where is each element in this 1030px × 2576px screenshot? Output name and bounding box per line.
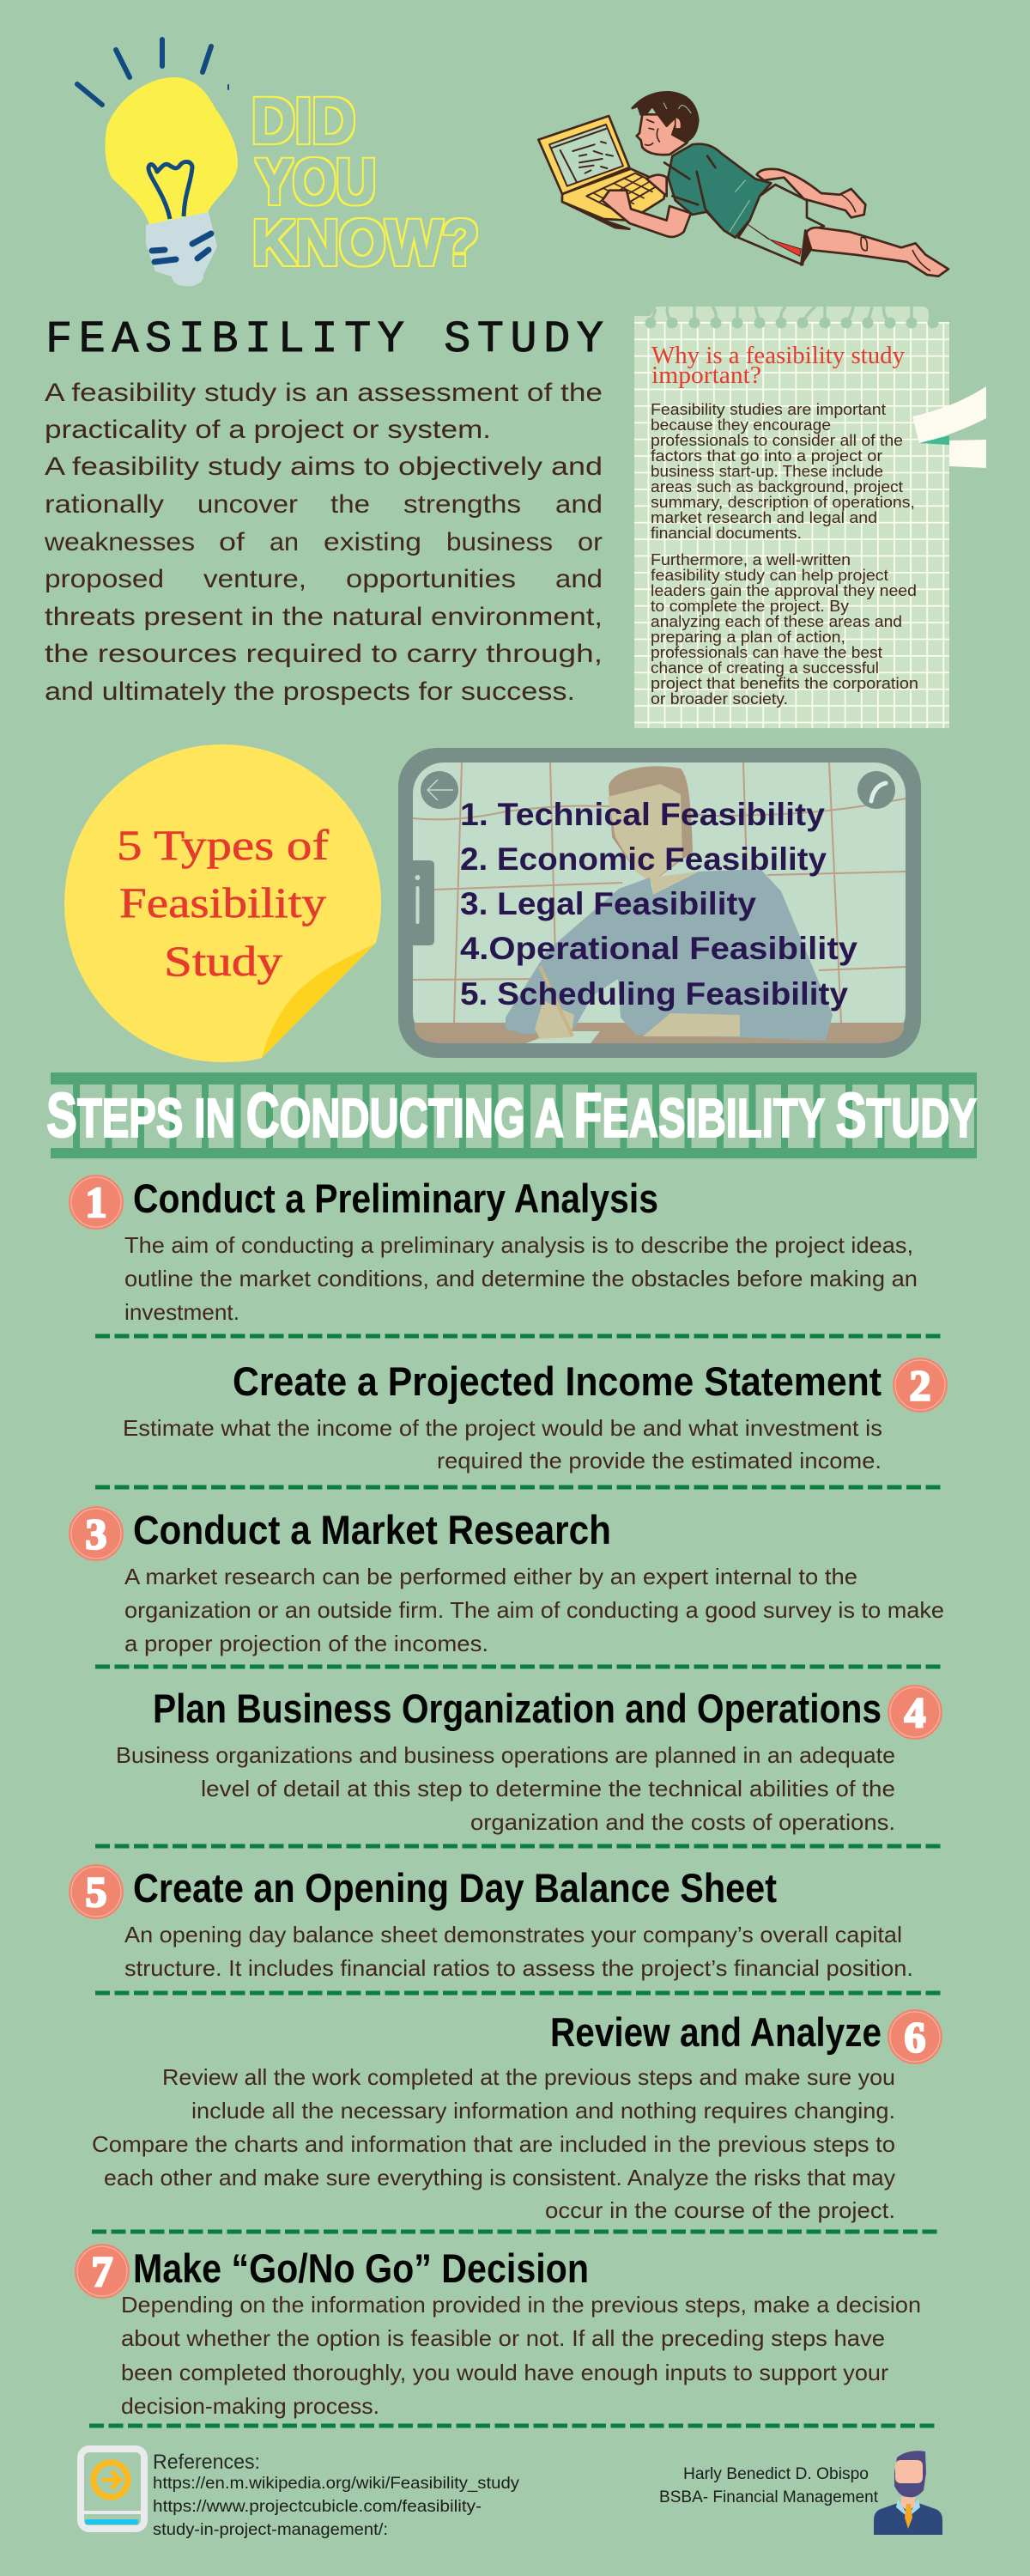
step text 5 (124, 1922, 913, 1981)
text block: importance paragraphs: chance of creating a successful (651, 659, 879, 677)
heading: why is a feasibility study important (651, 343, 905, 389)
icon: back button (421, 771, 458, 809)
step text 1: investment. (124, 1299, 239, 1325)
step text 2: Estimate what the income of the project would be and what investment is (123, 1415, 882, 1441)
badge 6 (888, 2009, 942, 2064)
text block: references: study-in-project-management/: (153, 2521, 388, 2539)
badge 2 (893, 1358, 948, 1413)
step text 4: organization and the costs of operations. (470, 1809, 895, 1835)
icon: paper tape (912, 386, 986, 468)
step text 7: decision-making process. (121, 2393, 379, 2419)
text block: importance paragraphs: or broader society. (651, 690, 788, 708)
list: types of feasibility (460, 797, 857, 1012)
step title 5: Create an Opening Day Balance Sheet (133, 1865, 777, 1911)
icon: author avatar (874, 2451, 942, 2535)
badge 4: 4 (905, 1688, 925, 1736)
panel: phone with feasibility types (398, 748, 921, 1058)
step text 5: structure. It includes financial ratios to assess the project’s financial position. (124, 1955, 913, 1981)
badge 7 (75, 2244, 130, 2299)
step title 1: Conduct a Preliminary Analysis (133, 1176, 658, 1221)
badge 1 (69, 1175, 124, 1230)
step text 7: Depending on the information provided in the previous steps, make a decision (121, 2292, 921, 2318)
text block: references: https://en.m.wikipedia.org/wiki/Feasibility_study (153, 2475, 520, 2493)
text block: importance paragraphs: areas such as background, project (651, 477, 903, 495)
step 7 (75, 2244, 921, 2419)
text block: references: https://www.projectcubicle.com/feasibility- (153, 2498, 482, 2516)
step text 3: A market research can be performed either by an expert internal to the (124, 1564, 857, 1589)
step 6 (92, 2009, 942, 2223)
text block: importance paragraphs: factors that go into a project or (651, 447, 882, 465)
text block: feasibility study definition: strengths (403, 490, 521, 519)
text block: feasibility study definition: the resources required to carry through, (45, 640, 603, 668)
text block: importance paragraphs: market research and legal and (651, 508, 877, 526)
step 2 (123, 1358, 948, 1473)
badge 7: 7 (91, 2247, 113, 2295)
list: types of feasibility: 5. Scheduling Feasibility (460, 976, 848, 1012)
callout: 5 types sticker: 5 Types of (117, 821, 329, 869)
heading: why is a feasibility study important: important? (651, 362, 761, 389)
text block: importance paragraphs: to complete the project. By (651, 597, 850, 615)
step 4 (116, 1685, 942, 1835)
step text 7: about whether the option is feasible or not. If all the preceding steps have (121, 2325, 885, 2351)
step text 6: Compare the charts and information that are included in the previous steps to (92, 2131, 895, 2157)
step text 6: each other and make sure everything is consistent. Analyze the risks that may (104, 2165, 895, 2190)
text block: feasibility study definition: business (446, 528, 553, 556)
text block: author: Harly Benedict D. Obispo (683, 2465, 869, 2483)
text block: importance paragraphs (651, 400, 918, 708)
step text 1: outline the market conditions, and determine the obstacles before making an (124, 1266, 918, 1291)
text block: feasibility study definition: weaknesses (44, 528, 195, 556)
text block: importance paragraphs: summary, description of operations, (651, 493, 915, 511)
text block: importance paragraphs: analyzing each of these areas and (651, 612, 902, 630)
text block: author: BSBA- Financial Management (659, 2488, 879, 2506)
heading: why is a feasibility study important: Why is a feasibility study (651, 343, 905, 369)
text block: importance paragraphs: financial documents. (651, 524, 802, 542)
badge 4 (888, 1685, 942, 1740)
step text 1: The aim of conducting a preliminary analysis is to describe the project ideas, (124, 1232, 913, 1258)
heading banner: steps in conducting: STEPS IN CONDUCTING A FEASIBILITY STUDY (46, 1081, 977, 1151)
text block: feasibility study definition (44, 379, 603, 706)
badge 3 (69, 1506, 124, 1561)
callout: 5 types sticker (64, 744, 381, 1062)
text block: feasibility study definition: practicality of a project or system. (45, 416, 491, 444)
heading: did you know: KNOW? (252, 207, 479, 278)
badge 6: 6 (905, 2013, 925, 2061)
step title 3: Conduct a Market Research (133, 1507, 611, 1552)
text block: feasibility study definition: existing (324, 528, 421, 556)
text block: importance paragraphs: professionals to consider all of the (651, 431, 903, 449)
text block: feasibility study definition: opportunities (346, 565, 516, 593)
text block: author (659, 2465, 879, 2506)
text block: feasibility study definition: uncover (197, 490, 298, 519)
text block: importance paragraphs: leaders gain the approval they need (651, 581, 917, 599)
icon: light bulb (77, 39, 238, 286)
illustration: boy with laptop (538, 92, 948, 276)
icon: reference book (81, 2449, 144, 2529)
badge 1: 1 (86, 1178, 106, 1226)
step text 6: Review all the work completed at the previous steps and make sure you (162, 2064, 895, 2090)
badge 5 (69, 1864, 124, 1919)
step text 2 (123, 1415, 882, 1473)
heading: feasibility study: FEASIBILITY STUDY (45, 314, 603, 365)
callout: 5 types sticker: Feasibility (119, 878, 326, 927)
list: types of feasibility: 3. Legal Feasibility (460, 886, 756, 921)
step text 4: level of detail at this step to determine the technical abilities of the (201, 1776, 895, 1801)
badge 3: 3 (86, 1510, 106, 1558)
text block: feasibility study definition: the (330, 490, 370, 519)
step title 2: Create a Projected Income Statement (233, 1358, 882, 1404)
text block: feasibility study definition: A feasibility study aims to objectively and (45, 453, 603, 481)
step 1 (69, 1175, 918, 1325)
step text 1 (124, 1232, 918, 1325)
panel: notebook note (634, 307, 986, 728)
list: types of feasibility: 4.Operational Feasibility (460, 931, 857, 966)
heading: did you know: YOU (256, 146, 376, 217)
step title 7: Make “Go/No Go” Decision (133, 2245, 589, 2291)
text block: importance paragraphs: Feasibility studies are important (651, 400, 886, 418)
icon: call button (857, 771, 895, 809)
heading: did you know (251, 85, 479, 278)
step text 3: a proper projection of the incomes. (124, 1631, 488, 1656)
step text 7: been completed thoroughly, you would have enough inputs to support your (121, 2360, 888, 2385)
heading: did you know: DID (251, 85, 355, 156)
step 3 (69, 1506, 944, 1656)
text block: importance paragraphs: project that benefits the corporation (651, 674, 918, 692)
illustration: man at desk (413, 762, 906, 1043)
text block: references: References: (153, 2451, 260, 2474)
text block: importance paragraphs: because they encourage (651, 416, 831, 434)
step text 6 (92, 2064, 895, 2223)
text block: feasibility study definition: of (219, 528, 245, 556)
badge 5: 5 (86, 1868, 106, 1916)
text block: feasibility study definition: or (578, 528, 603, 556)
text block: feasibility study definition: and (555, 490, 603, 519)
step text 3: organization or an outside firm. The aim of conducting a good survey is to make (124, 1597, 944, 1623)
step text 6: occur in the course of the project. (545, 2197, 895, 2223)
step text 2: required the provide the estimated income. (437, 1448, 882, 1473)
step text 6: include all the necessary information and nothing requires changing. (191, 2098, 895, 2123)
step text 4 (116, 1742, 895, 1835)
step text 3 (124, 1564, 944, 1656)
step text 7 (121, 2292, 921, 2419)
text block: feasibility study definition: and ultimately the prospects for success. (45, 677, 575, 706)
text block: importance paragraphs: professionals can have the best (651, 643, 882, 661)
text block: importance paragraphs: business start-up. These include (651, 462, 883, 480)
text block: importance paragraphs: preparing a plan of action, (651, 628, 845, 646)
phone notch (413, 860, 434, 945)
badge 2: 2 (910, 1361, 930, 1409)
text block: feasibility study definition: rationally (45, 490, 164, 519)
text block: feasibility study definition: and (555, 565, 603, 593)
text block: importance paragraphs: Furthermore, a well-written (651, 550, 851, 568)
text block: importance paragraphs: feasibility study can help project (651, 566, 888, 584)
text block: feasibility study definition: threats present in the natural environment, (45, 603, 603, 631)
list: types of feasibility: 2. Economic Feasibility (460, 841, 827, 877)
step title 4: Plan Business Organization and Operations (153, 1686, 882, 1731)
step 5 (69, 1864, 913, 1981)
text block: feasibility study definition: an (270, 528, 299, 556)
list: types of feasibility: 1. Technical Feasibility (460, 797, 825, 832)
text block: references (153, 2451, 520, 2539)
text block: feasibility study definition: proposed (45, 565, 164, 593)
text block: feasibility study definition: venture, (203, 565, 306, 593)
text block: feasibility study definition: A feasibility study is an assessment of the (45, 379, 603, 407)
step title 6: Review and Analyze (550, 2009, 882, 2055)
step text 5: An opening day balance sheet demonstrates your company’s overall capital (124, 1922, 902, 1947)
step text 4: Business organizations and business operations are planned in an adequate (116, 1742, 895, 1768)
callout: 5 types sticker: Study (164, 937, 282, 985)
